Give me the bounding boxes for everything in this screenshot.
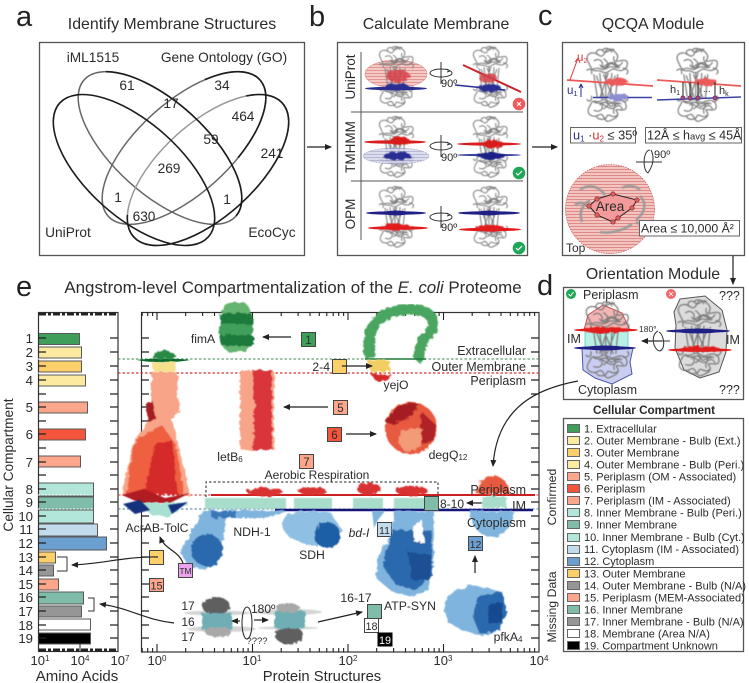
label SDH: SDH (299, 548, 325, 562)
x axis labels main chart: 10 (339, 653, 353, 668)
x axis labels main chart: 3 (448, 654, 453, 663)
arrow to box 12 (474, 556, 476, 573)
panel c: QCQA module: u (592, 128, 600, 142)
label letB6: letB (217, 450, 238, 464)
box 6: 6 (331, 430, 338, 442)
legend: cellular compartment: 2. Outer Membrane - Bulb (Ext.) (584, 436, 740, 448)
x axis labels left chart: 10 (111, 653, 125, 668)
x axis labels main chart: 0 (162, 654, 167, 663)
legend: cellular compartment: 10. Inner Membrane - Bulb (Cyt.) (584, 532, 745, 544)
dashed box aerobic respiration (206, 482, 438, 497)
arrow for box 8-10 (467, 502, 495, 504)
panel b: membrane calculation methods: 90º (441, 78, 457, 90)
label letB6: 6 (238, 455, 243, 464)
box 11: 11 (379, 525, 390, 537)
legend: cellular compartment: 7. Periplasm (IM - Associated) (584, 496, 731, 508)
protein: fimA (219, 302, 254, 352)
x axis labels left chart (31, 653, 130, 668)
x axis labels main chart: 10 (243, 653, 257, 668)
box 5 (334, 400, 348, 415)
panel a: Venn diagram: 269 (158, 161, 180, 176)
panel c: QCQA module: 90º (654, 149, 670, 161)
panel b: membrane calculation methods (338, 42, 528, 256)
panel c: QCQA module: ... (703, 84, 711, 94)
x axis labels main chart: 2 (353, 654, 358, 663)
y axis compartment numbers: 13 (18, 550, 33, 565)
protein: pfkA4 (444, 585, 507, 636)
legend: cellular compartment: 4. Outer Membrane - Bulb (Peri.) (584, 460, 744, 472)
panel d: orientation module: ??? (719, 383, 740, 397)
panel c: QCQA module: Area (596, 199, 625, 214)
x axis labels main chart: 1 (257, 654, 262, 663)
panel c: QCQA module: u (573, 128, 580, 142)
panel b letter: b (309, 1, 325, 33)
panel d: orientation module: 180° (639, 324, 657, 334)
panel d: orientation module: ??? (719, 289, 740, 303)
panel a heading: Identify Membrane Structures (68, 16, 276, 33)
panel c: QCQA module: 1 (573, 89, 578, 98)
x axis labels left chart: 10 (31, 653, 45, 668)
box TM: TM (179, 566, 192, 576)
box 2-4: 2-4 (312, 360, 330, 374)
bracket for compartments 13-14 (57, 557, 67, 571)
box 19: 19 (379, 635, 391, 647)
protein: AcrAB-TolC (122, 350, 190, 517)
panel c: QCQA module: ≤ 35º (604, 128, 637, 142)
legend: cellular compartment: 6. Periplasm (584, 484, 645, 496)
box 11 (378, 522, 392, 537)
legend: cellular compartment (563, 418, 746, 652)
y axis compartment numbers: 7 (26, 455, 33, 470)
panel a: Venn diagram (28, 42, 314, 272)
label fimA: fimA (191, 332, 216, 346)
panel a: Venn diagram: 61 (119, 78, 135, 93)
label 16-17: 16-17 (340, 591, 372, 605)
panel b: membrane calculation methods: 90º (441, 222, 457, 234)
panel c: QCQA module: Top (566, 241, 586, 255)
panel d: orientation module: Periplasm (583, 288, 639, 302)
protein: ATP-SYN (376, 511, 434, 597)
panel c: QCQA module: Area ≤ 10,000 Å² (641, 220, 734, 236)
panel d: orientation module: IM (567, 332, 581, 346)
y axis compartment numbers: 12 (18, 536, 33, 551)
y axis compartment numbers: 2 (26, 345, 33, 360)
bar chart: amino acids per compartment (38, 312, 118, 652)
panel d: orientation module: IM (726, 333, 740, 347)
legend side label: missing data: Missing Data (545, 571, 559, 643)
box 1 (302, 332, 316, 347)
protein: letB6 (240, 370, 274, 450)
panel a: Venn diagram: 1 (114, 190, 122, 205)
legend: cellular compartment: 19. Compartment Unknown (584, 640, 718, 652)
labels 17 16 17: 17 (181, 599, 195, 613)
membrane labels outer: Outer Membrane (432, 360, 526, 374)
legend: cellular compartment: 5. Periplasm (OM - Associated) (584, 472, 736, 484)
y axis compartment numbers: 10 (18, 509, 33, 524)
labels 17 16 17: 17 (181, 630, 195, 644)
y axis compartment numbers: 18 (18, 618, 33, 633)
box 7: 7 (303, 457, 310, 469)
panel c: QCQA module: k (725, 91, 729, 98)
mini proteins missing data (184, 597, 322, 644)
box 8-10: 8-10 (440, 497, 464, 511)
panel e letter: e (16, 271, 32, 303)
rotation icon and labels: ???? (246, 636, 268, 647)
arrow to letB (284, 406, 328, 408)
membrane labels outer (432, 344, 526, 388)
box 13 (150, 550, 164, 564)
panel b heading: Calculate Membrane (363, 16, 509, 33)
label bd-I: bd-I (349, 526, 370, 540)
y axis compartment numbers: 14 (18, 563, 33, 578)
panel a: Venn diagram: 241 (261, 146, 283, 161)
panel a: Venn diagram: 630 (133, 209, 156, 224)
panel d: orientation module: Cytoplasm (578, 383, 637, 397)
panel a letter: a (16, 1, 33, 33)
panel a: Venn diagram: UniProt (45, 225, 91, 240)
panel a: Venn diagram: Gene Ontology (GO) (161, 50, 287, 65)
arrow TM to AcrAB-TolC (160, 537, 183, 563)
panel c: QCQA module (562, 42, 744, 256)
box 12: 12 (470, 539, 481, 551)
label ATP-SYN: ATP-SYN (384, 599, 436, 613)
membrane labels inner: Cytoplasm (467, 516, 526, 530)
y axis compartment numbers: 9 (26, 495, 33, 510)
legend: cellular compartment: 12. Cytoplasm (584, 556, 654, 568)
y axis compartment numbers: 1 (26, 331, 33, 346)
protein: NDH-1 (180, 510, 288, 570)
heading: orientation module: Orientation Module (586, 266, 720, 283)
panel b: membrane calculation methods: 90º (441, 152, 457, 164)
membrane labels inner (467, 483, 526, 530)
box 6 (328, 428, 342, 442)
label AcrAB-TolC: AcrAB-TolC (126, 521, 189, 535)
y axis compartment numbers: 6 (26, 427, 33, 442)
aerobic respiration membrane (205, 483, 535, 510)
panel c: QCQA module: h (719, 85, 725, 97)
arrow to ATP-SYN box (318, 612, 362, 622)
panel d letter: d (537, 270, 553, 302)
panel a: Venn diagram: EcoCyc (248, 225, 296, 240)
y axis compartment numbers: 5 (26, 400, 33, 415)
y axis compartment numbers: 8 (26, 482, 33, 497)
panel c: QCQA module: u (567, 85, 573, 97)
legend: cellular compartment: 15. Periplasm (MEM-Associated) (584, 592, 745, 604)
arrow to bracket 16-17 (100, 604, 174, 623)
x axis labels left chart: 4 (85, 654, 90, 663)
panel a: Venn diagram: 59 (203, 132, 219, 147)
membrane labels outer: Extracellular (457, 344, 526, 358)
box 12 (468, 536, 482, 551)
legend: cellular compartment: 11. Cytoplasm (IM - Associated) (584, 544, 739, 556)
legend: cellular compartment: 16. Inner Membrane (584, 604, 683, 616)
protein: bd-I (372, 511, 385, 528)
panel a: Venn diagram: 34 (214, 78, 230, 93)
box 1: 1 (305, 335, 312, 347)
panel c: QCQA module: u (577, 52, 583, 64)
panel c: QCQA module: 2 (600, 134, 605, 144)
protein: periplasm reference (470, 476, 514, 537)
x axis labels main chart: 4 (544, 654, 549, 663)
x axis labels main chart: 10 (530, 653, 544, 668)
bracket for compartments 16-17 (88, 598, 94, 611)
legend heading: Cellular Compartment (593, 404, 715, 417)
panel a: Venn diagram: 464 (232, 109, 255, 124)
panel d: orientation module (564, 288, 744, 400)
x axis labels main chart: 10 (148, 653, 162, 668)
y axis compartment numbers: 19 (18, 631, 33, 646)
membrane labels outer: Periplasm (470, 374, 526, 388)
rotation icon and labels: 180º (251, 602, 276, 616)
panel b: membrane calculation methods: UniProt (343, 54, 358, 100)
box 16-17 (368, 604, 382, 618)
panel c letter: c (538, 0, 552, 32)
legend: cellular compartment: 3. Outer Membrane (584, 448, 679, 460)
box 7 (300, 454, 314, 469)
legend: cellular compartment: 1. Extracellular (584, 424, 657, 436)
box 18: 18 (365, 621, 378, 633)
panel b: membrane calculation methods: OPM (343, 199, 358, 229)
arrow c to d (732, 256, 734, 284)
x axis labels main chart (148, 653, 549, 668)
arrow to fimA (263, 336, 291, 338)
box 19 (378, 632, 392, 647)
legend: cellular compartment: 13. Outer Membrane (584, 568, 686, 580)
arrow box 13 to bracket (72, 557, 158, 565)
box 8-10 (424, 496, 464, 511)
panel c: QCQA module: 2 (583, 56, 588, 65)
panel c: QCQA module: 1 (676, 90, 680, 97)
panel a: Venn diagram: 17 (163, 96, 179, 111)
arrow b to c (532, 146, 557, 148)
legend: cellular compartment: 17. Inner Membrane - Bulb (N/A) (584, 616, 744, 628)
panel c heading: QCQA Module (602, 16, 704, 33)
panel b: membrane calculation methods: TMHMM (343, 121, 358, 173)
arrow to degQ (346, 433, 376, 435)
x axis labels left chart: 1 (45, 654, 50, 663)
y axis compartment numbers: 11 (19, 522, 33, 537)
membrane labels inner: IM (512, 499, 526, 513)
labels 17 16 17 (181, 599, 195, 644)
box 15: 15 (150, 580, 163, 592)
y axis compartment numbers (18, 331, 33, 646)
panel a: Venn diagram: 1 (223, 192, 231, 207)
x axis labels left chart: 10 (71, 653, 85, 668)
label degQ12: degQ (429, 448, 458, 462)
panel a: Venn diagram: iML1515 (67, 50, 120, 65)
membrane labels inner: Periplasm (470, 483, 526, 497)
panel c: QCQA module: 1 (580, 134, 585, 144)
protein: SDH (282, 511, 342, 548)
y axis compartment numbers: 15 (18, 577, 33, 592)
label pfkA4: 4 (518, 635, 523, 644)
box TM (178, 564, 192, 578)
y axis compartment numbers: 16 (18, 590, 33, 605)
main chart: protein structures scatter (72, 302, 539, 652)
panel c: QCQA module: 12Å ≤ havg ≤ 45Å (647, 128, 742, 142)
label NDH-1: NDH-1 (233, 525, 271, 539)
box 5: 5 (337, 403, 344, 415)
x axis labels main chart: 10 (434, 653, 448, 668)
y axis title: Cellular Compartment (1, 398, 16, 532)
rotation icon and labels (232, 602, 276, 647)
label yejO: yejO (383, 378, 409, 392)
legend: cellular compartment: 9. Inner Membrane (584, 520, 677, 532)
arrow a to b (307, 146, 331, 148)
label aerobic respiration: Aerobic Respiration (265, 468, 369, 482)
arrow to yejO (342, 365, 372, 367)
protein: degQ12 (385, 402, 437, 454)
legend side label: confirmed: Confirmed (545, 468, 559, 525)
label pfkA4: pfkA (494, 630, 518, 644)
legend: cellular compartment: 18. Membrane (Area N/A) (584, 628, 710, 640)
panel c: QCQA module: · (585, 128, 592, 142)
labels 17 16 17: 16 (181, 615, 195, 629)
panel e title: Angstrom-level Compartmentalization of the E. coli Proteome (64, 278, 522, 297)
legend: cellular compartment: 14. Outer Membrane - Bulb (N/A) (584, 580, 746, 592)
label degQ12: 12 (458, 453, 468, 462)
y axis compartment numbers: 3 (26, 359, 33, 374)
legend: cellular compartment: 8. Inner Membrane - Bulb (Peri.) (584, 508, 742, 520)
y axis compartment numbers: 4 (26, 373, 33, 388)
box 2-4 (312, 360, 346, 374)
y axis compartment numbers: 17 (18, 604, 33, 619)
curved arrow d to periplasm protein (493, 381, 578, 466)
x axis labels left chart: 7 (125, 654, 130, 663)
protein: yejO (365, 309, 433, 381)
panel c: QCQA module: h (670, 84, 676, 96)
